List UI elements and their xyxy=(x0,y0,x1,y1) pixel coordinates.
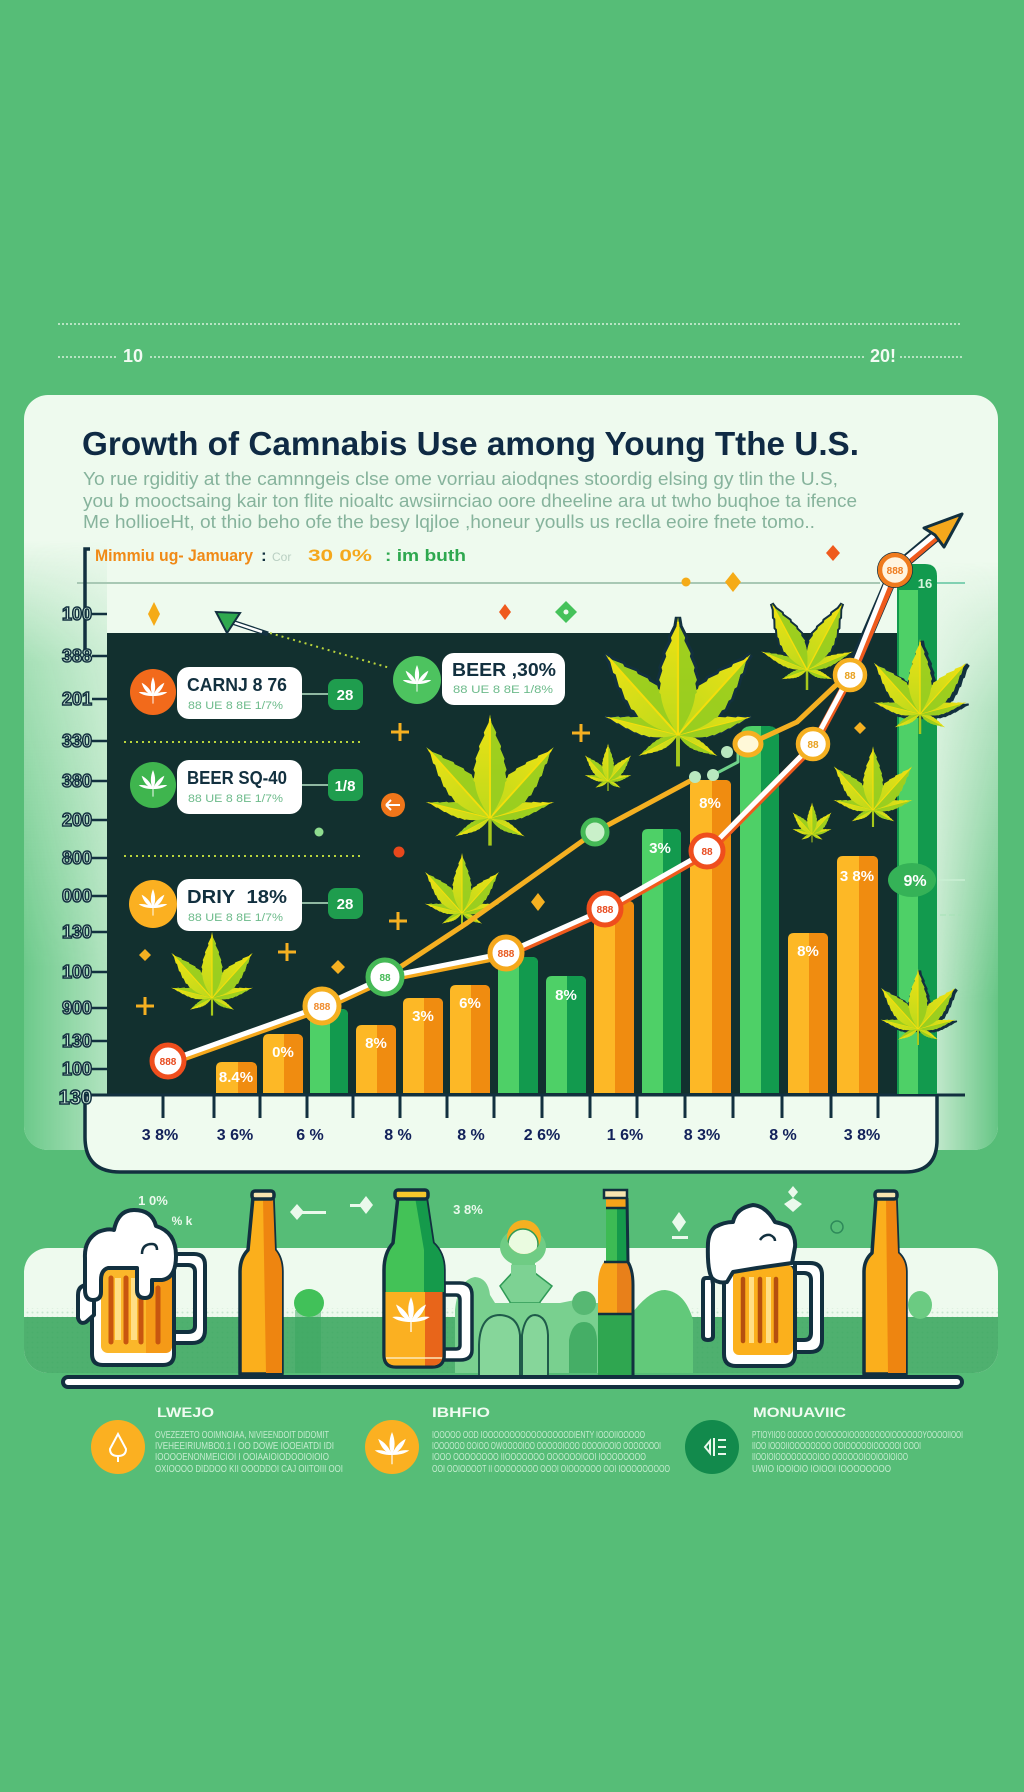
description: IOOO OOOOOOOO IIOOOOOOO OOOOOOIOOI IOOOOOOOO xyxy=(432,1451,646,1463)
marker 3 xyxy=(368,960,402,994)
round tree right xyxy=(908,1291,932,1319)
callout: dairy xyxy=(129,879,363,931)
description: IIOO IOOOIIOOOOOOOO OOIOOOOOIOOOOOI OOOI xyxy=(752,1440,921,1452)
leaf 8 xyxy=(418,853,506,929)
icon: arrow button xyxy=(381,793,405,817)
description: OOI OOIOOOOT II OOOOOOOO OOOI OIOOOOOO OOI IOOOOOOOOO xyxy=(432,1463,670,1475)
callout: dairy: 88 UE 8 8E 1/7% xyxy=(188,912,283,924)
y axis labels: 130 xyxy=(62,1031,92,1051)
intro text: you b mooctsaing kair ton flite nioaltc awsiirnciao oore dheeline ara ut twho buqhoe ta ifence xyxy=(83,491,857,511)
description: OVEZEZETO OOIMNOIAA, NIVIEENDOIT DIDOMIT xyxy=(155,1429,329,1441)
marker 9 xyxy=(798,729,828,759)
bottle far right xyxy=(864,1191,906,1374)
bar chart xyxy=(216,564,937,1094)
bar 10 xyxy=(642,829,681,1093)
intro text: Me hollioeHt, ot thio beho ofe the besy lqjloe ,honeur youlls us reclla eoire fnete tomo.. xyxy=(83,512,815,532)
round tree left xyxy=(294,1289,324,1373)
main line red top xyxy=(851,529,945,676)
main line underlay red xyxy=(506,677,850,955)
bar 4: 8% xyxy=(365,1035,387,1052)
description xyxy=(432,1429,670,1475)
y axis labels: 388 xyxy=(62,646,92,666)
heading: LWEJO xyxy=(157,1404,214,1420)
main line underlay orange xyxy=(168,955,506,1063)
bar 2: 0% xyxy=(272,1044,294,1061)
callout: cannabis xyxy=(130,667,363,719)
bar 5 xyxy=(403,998,443,1093)
callout: beer: 1/8 xyxy=(335,778,355,795)
description: IOOOOO OOD IOOOOOOOOOOOOOOOODIENTY IOOOIIOOOOO xyxy=(432,1429,645,1441)
bar 11 xyxy=(690,780,731,1093)
x axis labels: 3 8% xyxy=(844,1127,880,1144)
y axis labels xyxy=(59,604,92,1109)
bar 14: 3 8% xyxy=(840,868,874,885)
beer mug right xyxy=(703,1205,822,1366)
marker 11 xyxy=(877,552,913,588)
reference line xyxy=(77,582,965,584)
y axis labels: 380 xyxy=(62,771,92,791)
y axis labels: 800 xyxy=(62,848,92,868)
icon: white leaf on bottle xyxy=(392,1297,430,1332)
leaf 10 xyxy=(874,969,963,1045)
marker 2 xyxy=(305,989,339,1023)
bar 8: 8% xyxy=(555,987,577,1004)
small green connector xyxy=(717,742,738,773)
x axis labels xyxy=(142,1127,880,1144)
x axis labels: 3 8% xyxy=(142,1127,178,1144)
arrow head xyxy=(924,514,962,547)
floating labels and ornaments: 3 8% xyxy=(453,1202,483,1217)
bar 5: 3% xyxy=(412,1008,434,1025)
description: OXIOOOO DIDDOO KII OOODDOI CAJ OIITOIII OOI xyxy=(155,1463,343,1475)
marker 4: 888 xyxy=(498,949,515,960)
marker 4 xyxy=(490,937,522,969)
y axis ticks xyxy=(92,614,107,1069)
heading: IBHFIO xyxy=(432,1404,490,1420)
x axis labels: 8 % xyxy=(769,1127,797,1144)
icon: list xyxy=(685,1420,739,1474)
bar 1: 8.4% xyxy=(219,1069,253,1086)
legend line: : xyxy=(261,546,267,565)
x axis labels: 8 % xyxy=(384,1127,412,1144)
bar 6 xyxy=(450,985,490,1093)
marker 8 xyxy=(735,733,761,755)
x axis labels: 8 % xyxy=(457,1127,485,1144)
x axis ticks xyxy=(163,1095,878,1118)
intro text: Yo rue rgiditiy at the camnngeis clse ome vorriau aiodqnes stoordig elsing gy tlin the U.S, xyxy=(83,469,838,489)
leaf 2 xyxy=(592,617,764,766)
y axis labels: 000 xyxy=(62,886,92,906)
bar 6: 6% xyxy=(459,995,481,1012)
marker 2: 888 xyxy=(314,1002,331,1013)
bar 9 xyxy=(594,901,634,1093)
legend line: Mimmiu ug- Jamuary xyxy=(95,546,253,565)
leaf 7 xyxy=(581,744,635,791)
x axis labels: 3 6% xyxy=(217,1127,253,1144)
x axis labels: 1 6% xyxy=(607,1127,643,1144)
icon: spade xyxy=(91,1420,145,1474)
green hills xyxy=(455,1277,693,1375)
bar 15 xyxy=(897,564,937,1094)
leaf 9 xyxy=(164,932,260,1016)
y axis labels: 100 xyxy=(62,962,92,982)
floating labels and ornaments: 1 0% xyxy=(138,1193,168,1208)
chart frame xyxy=(85,1094,937,1172)
bar 14 xyxy=(837,856,878,1093)
legend item 1 xyxy=(91,1404,343,1475)
y axis labels: 201 xyxy=(62,689,92,709)
bar 12 xyxy=(740,726,779,1093)
callout: beer xyxy=(130,760,363,814)
shelf xyxy=(63,1377,962,1387)
main line white xyxy=(168,532,938,1061)
icon: leaf xyxy=(365,1420,419,1474)
heading: MONUAVIIC xyxy=(753,1404,846,1420)
panel: main chart card xyxy=(24,395,998,1150)
legend line xyxy=(95,546,466,565)
y axis labels: 330 xyxy=(62,731,92,751)
description: IOOOOOO OOIOO OWOOOOIOO OOOOOIOOO OOOOIOOIO OOOOOOOI xyxy=(432,1440,661,1452)
callout: top beer with pointer xyxy=(216,612,565,705)
leaf 3 xyxy=(759,598,855,690)
decorative plus signs xyxy=(136,723,590,1015)
marker 6: 888 xyxy=(597,905,614,916)
bar 15: 16 xyxy=(918,576,932,591)
callout: cannabis: CARNJ 8 76 xyxy=(187,675,287,695)
description: UWIO IOOIOIO IOIOOI IOOOOOOOO xyxy=(752,1463,891,1475)
marker 1 xyxy=(152,1045,184,1077)
bar 1 xyxy=(216,1062,257,1093)
x axis labels: 2 6% xyxy=(524,1127,560,1144)
bar 2 xyxy=(263,1034,303,1093)
bar 7 xyxy=(498,957,538,1093)
center figure xyxy=(500,1220,552,1303)
leaf 5 xyxy=(827,746,919,827)
timeline header: 10 xyxy=(123,346,143,366)
leaf 1 xyxy=(415,714,565,846)
marker 6 xyxy=(589,893,621,925)
marker 11: 888 xyxy=(887,566,904,577)
y axis labels: 900 xyxy=(62,998,92,1018)
callout: cannabis: 88 UE 8 8E 1/7% xyxy=(188,700,283,712)
description xyxy=(752,1429,963,1475)
bottle left orange xyxy=(240,1191,282,1374)
cannabis leaves xyxy=(164,598,919,1016)
chart background xyxy=(107,633,907,1095)
line chart xyxy=(168,528,945,1063)
bottle right center xyxy=(598,1190,633,1375)
intro text xyxy=(83,469,857,532)
bottles and mugs scene xyxy=(78,1190,932,1375)
bar 13 xyxy=(788,933,828,1093)
marker 1: 888 xyxy=(160,1057,177,1068)
bottom band xyxy=(24,1248,998,1377)
callout: dairy: DRIY 18% xyxy=(187,887,287,907)
marker 10 xyxy=(835,660,865,690)
marker 7: 88 xyxy=(701,847,713,858)
legend item 2 xyxy=(365,1404,670,1475)
marker 10: 88 xyxy=(844,671,856,682)
marker 5 xyxy=(583,820,607,844)
y axis labels: 100 xyxy=(62,1059,92,1079)
x axis labels: 8 3% xyxy=(684,1127,720,1144)
floating labels and ornaments xyxy=(138,1186,843,1239)
right side value xyxy=(888,863,965,915)
marker 9: 88 xyxy=(807,740,819,751)
decorative diamonds xyxy=(139,545,866,974)
upper orange line xyxy=(385,675,850,977)
title: Growth of Camnabis Use among Young Tthe U.S. xyxy=(82,425,859,462)
callout: beer: BEER SQ-40 xyxy=(187,768,287,788)
legend line: Cor xyxy=(272,550,291,564)
pale dots xyxy=(689,746,733,783)
y axis labels: 130 xyxy=(59,1087,92,1109)
description: IIOOIOIOOOOOOOOIOO OOOOOOIOOIOOIOIOO xyxy=(752,1451,908,1463)
y axis labels: 200 xyxy=(62,810,92,830)
x axis labels: 6 % xyxy=(296,1127,324,1144)
description xyxy=(155,1429,343,1475)
axis line xyxy=(85,549,937,1172)
beer mug left xyxy=(78,1210,205,1365)
right side value: 9% xyxy=(903,873,927,890)
leaf 6 xyxy=(789,802,835,842)
callout: beer: 88 UE 8 8E 1/7% xyxy=(188,793,283,805)
callout: cannabis: 28 xyxy=(337,687,353,704)
bar 11: 8% xyxy=(699,795,721,812)
leaf 4 xyxy=(866,639,976,734)
floating labels and ornaments: % k xyxy=(172,1214,193,1228)
bar 10: 3% xyxy=(649,840,671,857)
chart markers xyxy=(152,552,913,1077)
dotted dividers xyxy=(124,742,363,856)
legend line: 30 0% xyxy=(308,546,372,565)
y axis labels: 130 xyxy=(62,922,92,942)
description: IOOOOENONMEICIOI I OOIAAIOIODOOIOIOIO xyxy=(155,1451,329,1463)
description: IVEHEEIRIUMBO0.1 I OO DOWE IOOEIATDI IDI xyxy=(155,1440,334,1452)
callout: dairy: 28 xyxy=(337,896,353,913)
legend item 3 xyxy=(685,1404,963,1475)
callout: top beer with pointer: 88 UE 8 8E 1/8% xyxy=(453,684,553,696)
main line outline top xyxy=(850,528,945,675)
x axis line xyxy=(85,1094,965,1096)
marker 7 xyxy=(691,835,723,867)
bottle center green xyxy=(384,1190,472,1367)
y axis labels: 100 xyxy=(62,604,92,624)
overlapping outlined leaves xyxy=(866,639,976,1045)
timeline header xyxy=(58,324,962,366)
bar 3 xyxy=(310,1009,348,1093)
timeline header: 20! xyxy=(870,346,896,366)
legend line: : im buth xyxy=(385,546,466,565)
marker 3: 88 xyxy=(379,973,391,984)
callout: top beer with pointer: BEER ,30% xyxy=(452,660,556,680)
bar 4 xyxy=(356,1025,396,1093)
bar 8 xyxy=(546,976,586,1093)
bar 13: 8% xyxy=(797,943,819,960)
